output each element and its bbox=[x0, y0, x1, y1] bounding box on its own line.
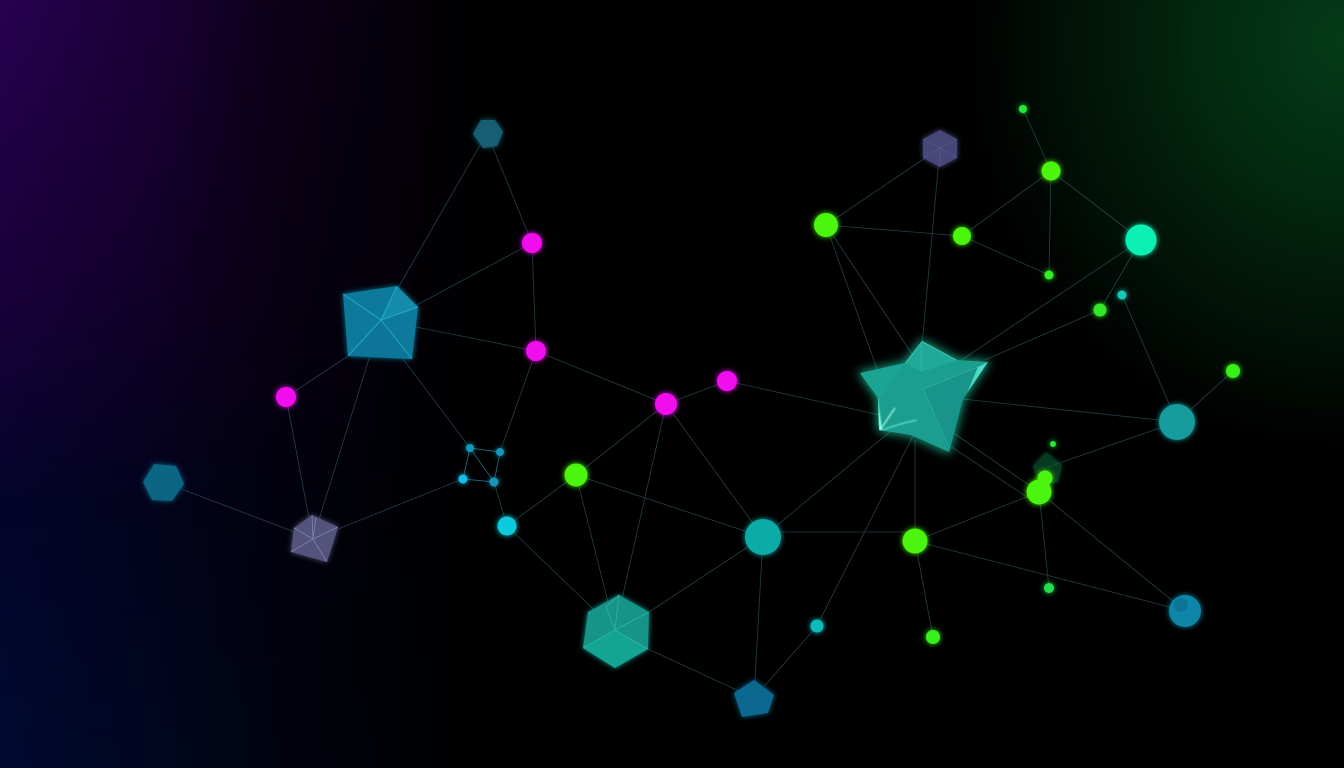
nodes: small blue square cluster bbox=[458, 444, 504, 486]
node: left hexagon bbox=[143, 464, 184, 501]
node: faint green polygon bbox=[1033, 452, 1062, 486]
node: top hexagon bbox=[473, 120, 503, 148]
node: star hub bbox=[860, 341, 988, 452]
nodes: teal and cyan bbox=[498, 224, 1201, 632]
node: teal hexagon bbox=[583, 595, 649, 668]
node: violet hexagon bbox=[923, 130, 957, 167]
nodes: magenta bbox=[276, 233, 737, 415]
node: blue pentagon bbox=[343, 286, 418, 359]
node: blue bottom pentagon bbox=[734, 680, 774, 717]
node: grey-violet polygon bbox=[291, 515, 338, 562]
connection lines bbox=[163, 109, 1233, 698]
node detail: dark spot on blue circle bbox=[1174, 598, 1188, 612]
nodes: green bbox=[564, 105, 1240, 644]
